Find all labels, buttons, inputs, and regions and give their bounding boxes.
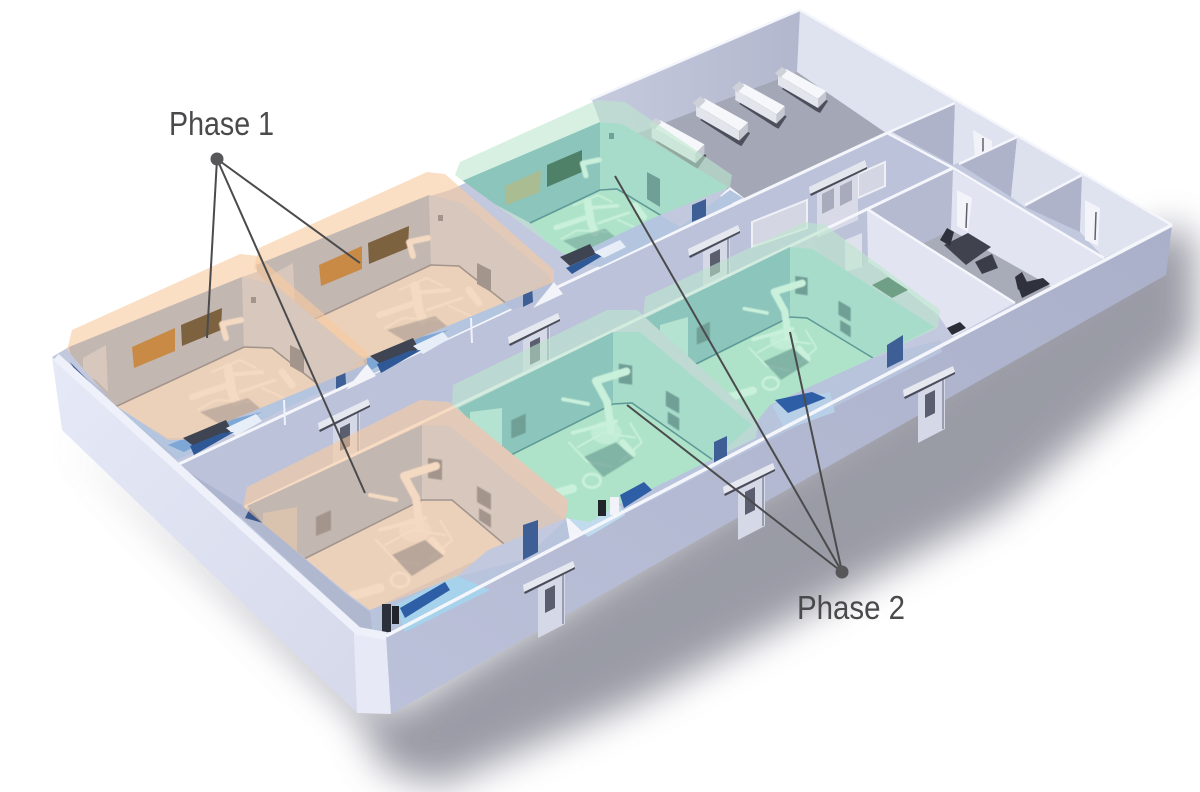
building shadow bbox=[62, 225, 1195, 785]
lower rooms top edge bbox=[245, 168, 953, 507]
double door bbox=[809, 160, 867, 238]
exterior left wall bbox=[52, 357, 357, 713]
lower floor bases bbox=[235, 340, 942, 636]
partition panel bbox=[887, 335, 903, 368]
panel: room 2, phase 1 bbox=[247, 172, 563, 378]
panel: room 5, phase 2 bbox=[452, 310, 758, 522]
panel: room 1, phase 1 bbox=[60, 254, 376, 460]
small rooms on right bbox=[888, 103, 1172, 258]
ward and partition edges bbox=[590, 10, 1172, 303]
equipment tower bbox=[382, 582, 450, 632]
left wall top edge bbox=[56, 357, 386, 636]
front door 3 bbox=[903, 366, 955, 443]
window in corridor wall bbox=[752, 200, 807, 247]
corridor door 1 bbox=[318, 399, 370, 476]
panel: room 3, phase 2 bbox=[455, 100, 743, 274]
equipment cart bbox=[598, 482, 652, 516]
panel: room 4, phase 1 bbox=[243, 400, 568, 632]
front door 1 bbox=[523, 561, 575, 638]
side room right of phase 2 bbox=[812, 209, 1015, 337]
white equipment bbox=[594, 240, 626, 258]
Phase 1 label: Phase 1 bbox=[169, 105, 274, 142]
Phase 2 leader lines bbox=[615, 176, 842, 572]
small window in corridor wall bbox=[858, 162, 885, 198]
partition panel bbox=[714, 436, 727, 466]
corridor end floor bbox=[177, 465, 262, 525]
building floor plate bbox=[52, 10, 1172, 636]
meeting room bbox=[870, 170, 1104, 304]
icon: desk and chair bbox=[1015, 272, 1050, 298]
front wall top edge bbox=[386, 225, 1172, 636]
front door 2 bbox=[723, 463, 775, 540]
Phase 1 dot bbox=[210, 152, 224, 166]
partition panel bbox=[523, 520, 538, 560]
corridor door 2 bbox=[508, 313, 560, 390]
icon: bed 2 bbox=[732, 81, 787, 129]
callout: Phase 2 bbox=[615, 176, 905, 626]
icon: meeting table bbox=[940, 228, 998, 274]
bench bbox=[872, 277, 908, 298]
icon: bed 4 bbox=[648, 118, 707, 169]
corridor top edge bbox=[177, 133, 887, 465]
panel: room 6, phase 2 bbox=[637, 222, 940, 420]
operating table bbox=[560, 244, 596, 266]
Phase 2 dot bbox=[836, 566, 848, 578]
exterior corner bevel bbox=[354, 633, 391, 714]
operating table bbox=[775, 392, 826, 413]
corridor wall bbox=[177, 133, 953, 507]
exterior front wall bbox=[386, 225, 1172, 714]
Phase 1 leader lines bbox=[207, 159, 365, 493]
corridor door 3 bbox=[688, 225, 740, 302]
callout: Phase 1 bbox=[169, 105, 365, 493]
ward room bbox=[592, 10, 1172, 232]
blue tray bbox=[566, 250, 612, 274]
icon: bed 1 bbox=[775, 67, 828, 113]
icon: bed 3 bbox=[693, 96, 750, 146]
Phase 2 label: Phase 2 bbox=[797, 589, 905, 626]
